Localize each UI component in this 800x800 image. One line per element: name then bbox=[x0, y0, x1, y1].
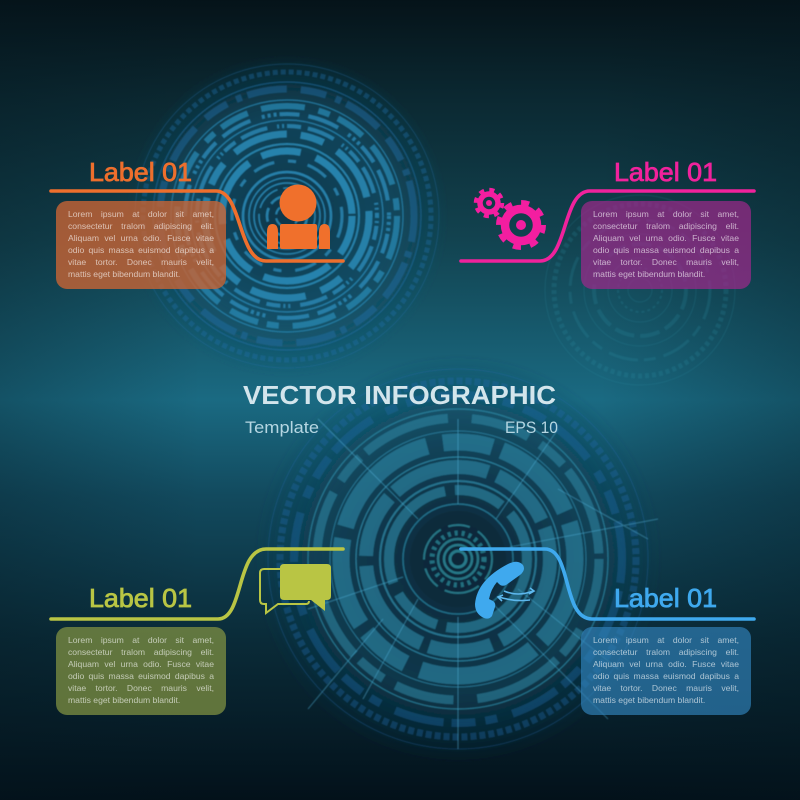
panel: green text box: Lorem ipsum at dolor sit amet, bbox=[68, 635, 214, 645]
panel: green text box: vitae tortor. Donec mauris velit, bbox=[68, 683, 214, 693]
panel: orange text box: consectetur tralom adipiscing elit. bbox=[68, 221, 214, 231]
orange label: Label 01 bbox=[89, 157, 192, 187]
panel: blue text box: consectetur tralom adipiscing elit. bbox=[593, 647, 739, 657]
blue label: Label 01 bbox=[614, 583, 717, 613]
panel: green text box: odio quis massa euismod dapibus a bbox=[68, 671, 214, 681]
panel: green text box bbox=[56, 627, 226, 715]
icon: person bbox=[267, 184, 330, 249]
panel: magenta text box bbox=[581, 201, 751, 289]
orange connector bbox=[51, 191, 343, 261]
panel: blue text box: odio quis massa euismod dapibus a bbox=[593, 671, 739, 681]
panel: blue text box: Lorem ipsum at dolor sit amet, bbox=[593, 635, 739, 645]
panel: orange text box: Lorem ipsum at dolor sit amet, bbox=[68, 209, 214, 219]
panel: orange text box: mattis eget bibendum blandit. bbox=[68, 269, 180, 279]
title: Template bbox=[245, 418, 319, 437]
title: VECTOR INFOGRAPHIC bbox=[243, 380, 556, 410]
icon: phone bbox=[475, 562, 534, 619]
panel: magenta text box: odio quis massa euismod dapibus a bbox=[593, 245, 739, 255]
panel: magenta text box: Lorem ipsum at dolor sit amet, bbox=[593, 209, 739, 219]
panel: green text box: Aliquam vel urna odio. Fusce vitae bbox=[68, 659, 214, 669]
panel: blue text box: vitae tortor. Donec mauris velit, bbox=[593, 683, 739, 693]
panel: green text box: consectetur tralom adipiscing elit. bbox=[68, 647, 214, 657]
panel: blue text box bbox=[581, 627, 751, 715]
technology circle top bbox=[125, 54, 449, 378]
panel: orange text box: vitae tortor. Donec mauris velit, bbox=[68, 257, 214, 267]
panel: orange text box bbox=[56, 201, 226, 289]
panel: magenta text box: consectetur tralom adipiscing elit. bbox=[593, 221, 739, 231]
green label: Label 01 bbox=[89, 583, 192, 613]
magenta connector bbox=[461, 191, 754, 261]
panel: magenta text box: Aliquam vel urna odio. Fusce vitae bbox=[593, 233, 739, 243]
panel: blue text box: Aliquam vel urna odio. Fusce vitae bbox=[593, 659, 739, 669]
icon: gears bbox=[476, 190, 543, 247]
panel: orange text box: Aliquam vel urna odio. Fusce vitae bbox=[68, 233, 214, 243]
panel: magenta text box: mattis eget bibendum blandit. bbox=[593, 269, 705, 279]
magenta label: Label 01 bbox=[614, 157, 717, 187]
panel: green text box: mattis eget bibendum blandit. bbox=[68, 695, 180, 705]
panel: orange text box: odio quis massa euismod dapibus a bbox=[68, 245, 214, 255]
technology circle bottom bbox=[253, 354, 663, 764]
blue connector bbox=[461, 549, 754, 619]
title: EPS 10 bbox=[505, 418, 558, 437]
icon: speech bubbles bbox=[260, 564, 331, 613]
panel: magenta text box: vitae tortor. Donec mauris velit, bbox=[593, 257, 739, 267]
green connector bbox=[51, 549, 343, 619]
panel: blue text box: mattis eget bibendum blandit. bbox=[593, 695, 705, 705]
faint circle top right bbox=[545, 195, 735, 385]
